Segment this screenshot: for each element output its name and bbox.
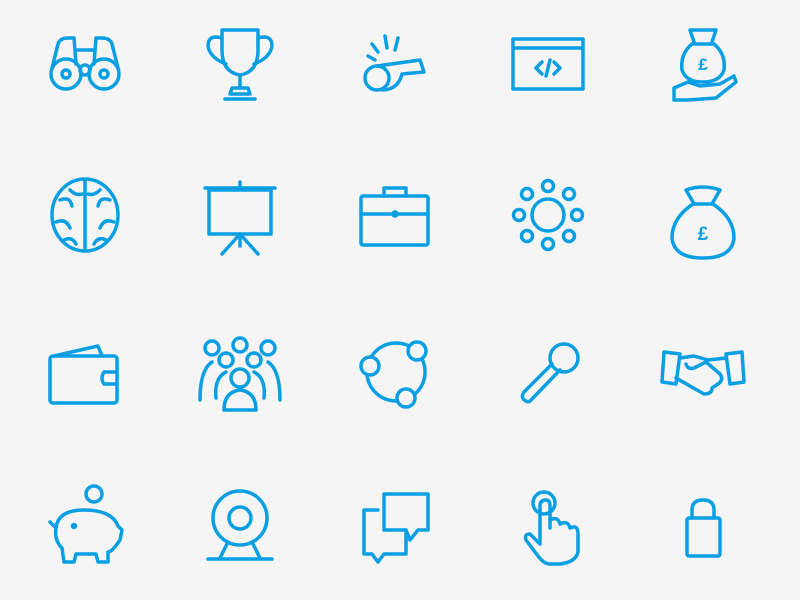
icon: microphone [522, 344, 578, 402]
icon: webcam [208, 491, 272, 559]
icon: binoculars [51, 38, 119, 89]
icon: chat bubbles [364, 494, 428, 562]
icon: code window [513, 39, 583, 89]
icon: money bag [672, 187, 734, 258]
icon: padlock [687, 500, 720, 556]
icon: money bag on hand: £ [698, 55, 708, 74]
icon: brain [52, 179, 118, 251]
icon: briefcase [361, 188, 428, 245]
icon: presentation board [205, 182, 275, 254]
icon: connected nodes [361, 342, 426, 407]
icon: sun circles [514, 180, 582, 250]
icon: piggy bank [50, 486, 122, 562]
icon: wallet [50, 346, 117, 403]
icon: group of people [200, 338, 280, 410]
icon: trophy [208, 30, 272, 99]
icon: handshake [662, 352, 744, 394]
icon: money bag on hand [674, 30, 736, 100]
icon: finger tap [526, 492, 578, 564]
icon: money bag: £ [698, 224, 709, 245]
icon: whistle [365, 36, 424, 90]
